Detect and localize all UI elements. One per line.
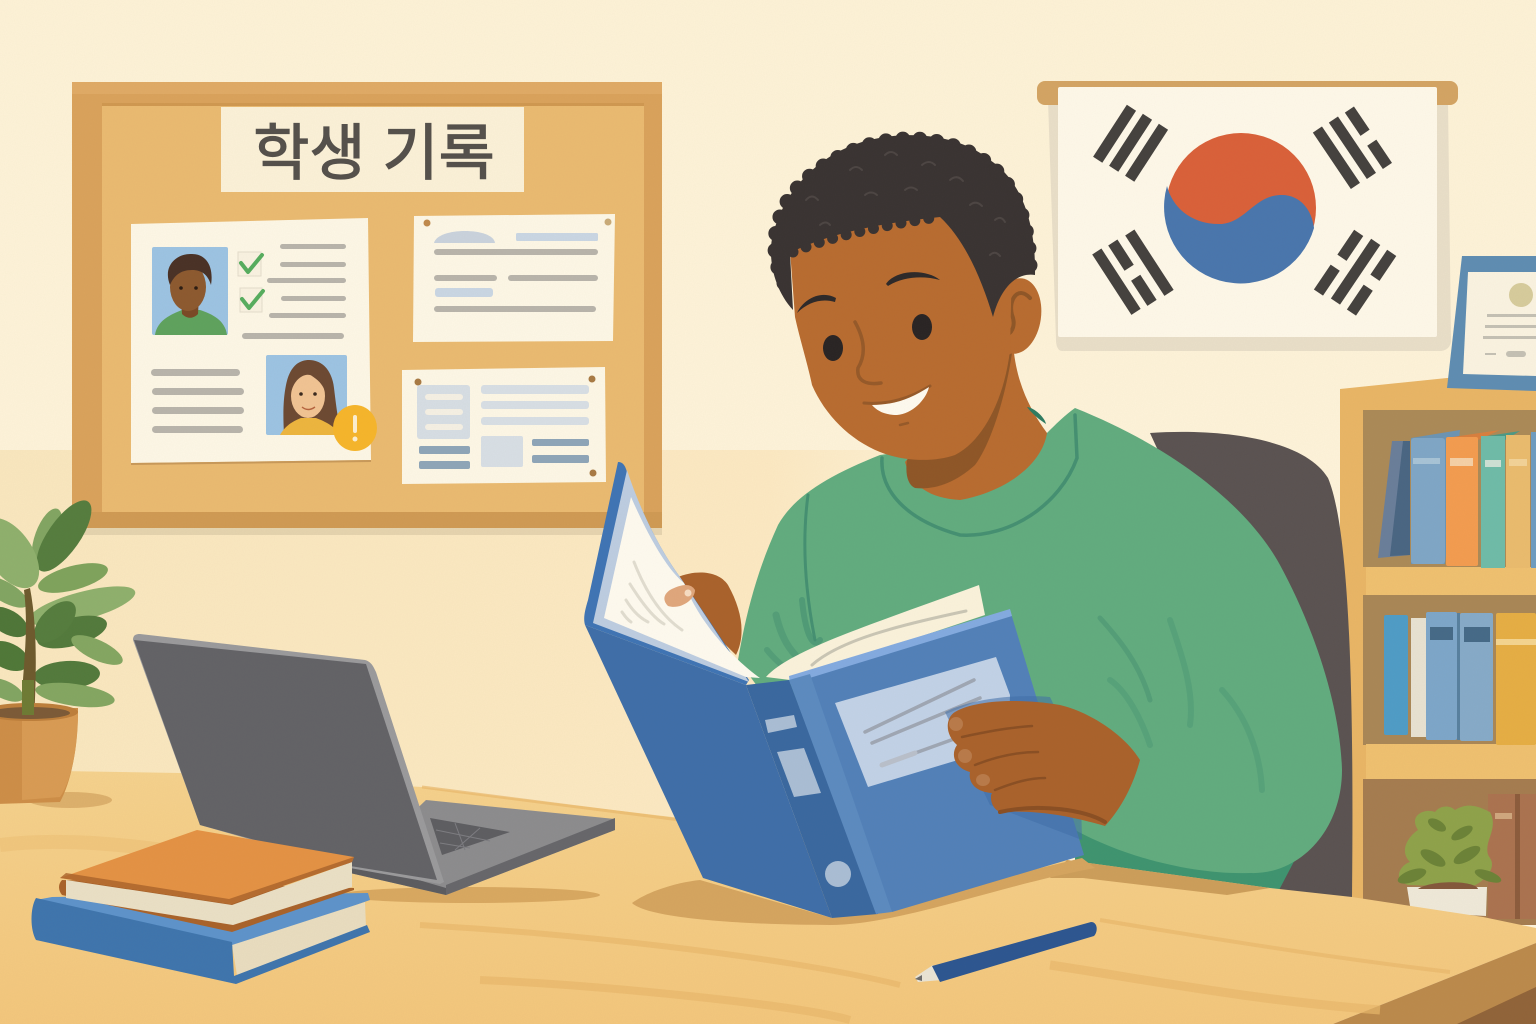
smile xyxy=(864,386,930,425)
panel: bookshelf xyxy=(1340,256,1536,925)
checkbox: second check xyxy=(240,288,263,312)
photo: female student xyxy=(266,355,347,435)
left hand behind page xyxy=(678,572,742,655)
hair xyxy=(771,135,1035,317)
nose xyxy=(855,322,881,384)
panel: Korean flag hanging on wall xyxy=(1037,81,1458,351)
terracotta pot xyxy=(0,680,78,804)
shadow under hand on cover xyxy=(945,696,1082,840)
left page with text lines xyxy=(604,497,760,678)
flag trigrams xyxy=(1092,105,1396,316)
neck xyxy=(905,345,1047,500)
cover label xyxy=(835,657,1010,787)
paper: note with lines xyxy=(413,214,615,342)
middle row of binders xyxy=(1384,612,1536,745)
potted plant xyxy=(0,492,139,808)
orange book xyxy=(59,830,354,932)
right page xyxy=(766,585,985,680)
stacked books xyxy=(32,830,370,984)
icon: warning badge xyxy=(333,405,377,451)
eyes xyxy=(823,314,932,361)
office chair xyxy=(1150,432,1352,897)
head and face xyxy=(771,135,1035,460)
checkbox: first check xyxy=(238,252,262,276)
laptop xyxy=(133,634,615,903)
laptop lid xyxy=(133,634,444,884)
left page board xyxy=(584,462,749,685)
board heading label: 학생 기록 xyxy=(253,119,495,187)
laptop base xyxy=(350,800,615,895)
icon: taegeuk circle xyxy=(1164,133,1316,283)
blue pencil xyxy=(915,922,1097,982)
record text lines xyxy=(151,244,346,433)
person: student xyxy=(738,135,1342,892)
panel: cork notice board xyxy=(72,82,662,535)
book shadow on desk xyxy=(632,858,1095,925)
icon: framed certificate xyxy=(1447,256,1536,391)
photo: male student xyxy=(152,247,228,335)
left cover xyxy=(585,625,832,918)
paper: student records with photos xyxy=(131,218,377,465)
right hand holding book xyxy=(948,701,1140,826)
thumb xyxy=(664,585,695,607)
ear xyxy=(988,275,1046,357)
wooden desk xyxy=(0,770,1536,1024)
blue book xyxy=(32,893,370,984)
right cover xyxy=(789,610,1084,912)
bottom row boxes xyxy=(1488,794,1536,919)
paper: form note xyxy=(402,367,606,484)
green sweater xyxy=(738,408,1342,892)
collar shadow xyxy=(1027,407,1046,424)
spine xyxy=(746,674,892,918)
top row of binders xyxy=(1378,430,1536,568)
leaves and stem xyxy=(0,492,139,722)
open blue record book xyxy=(584,462,1084,918)
icon: small shelf plant xyxy=(1396,806,1503,916)
board heading label xyxy=(221,107,524,192)
eyebrows xyxy=(797,272,940,313)
